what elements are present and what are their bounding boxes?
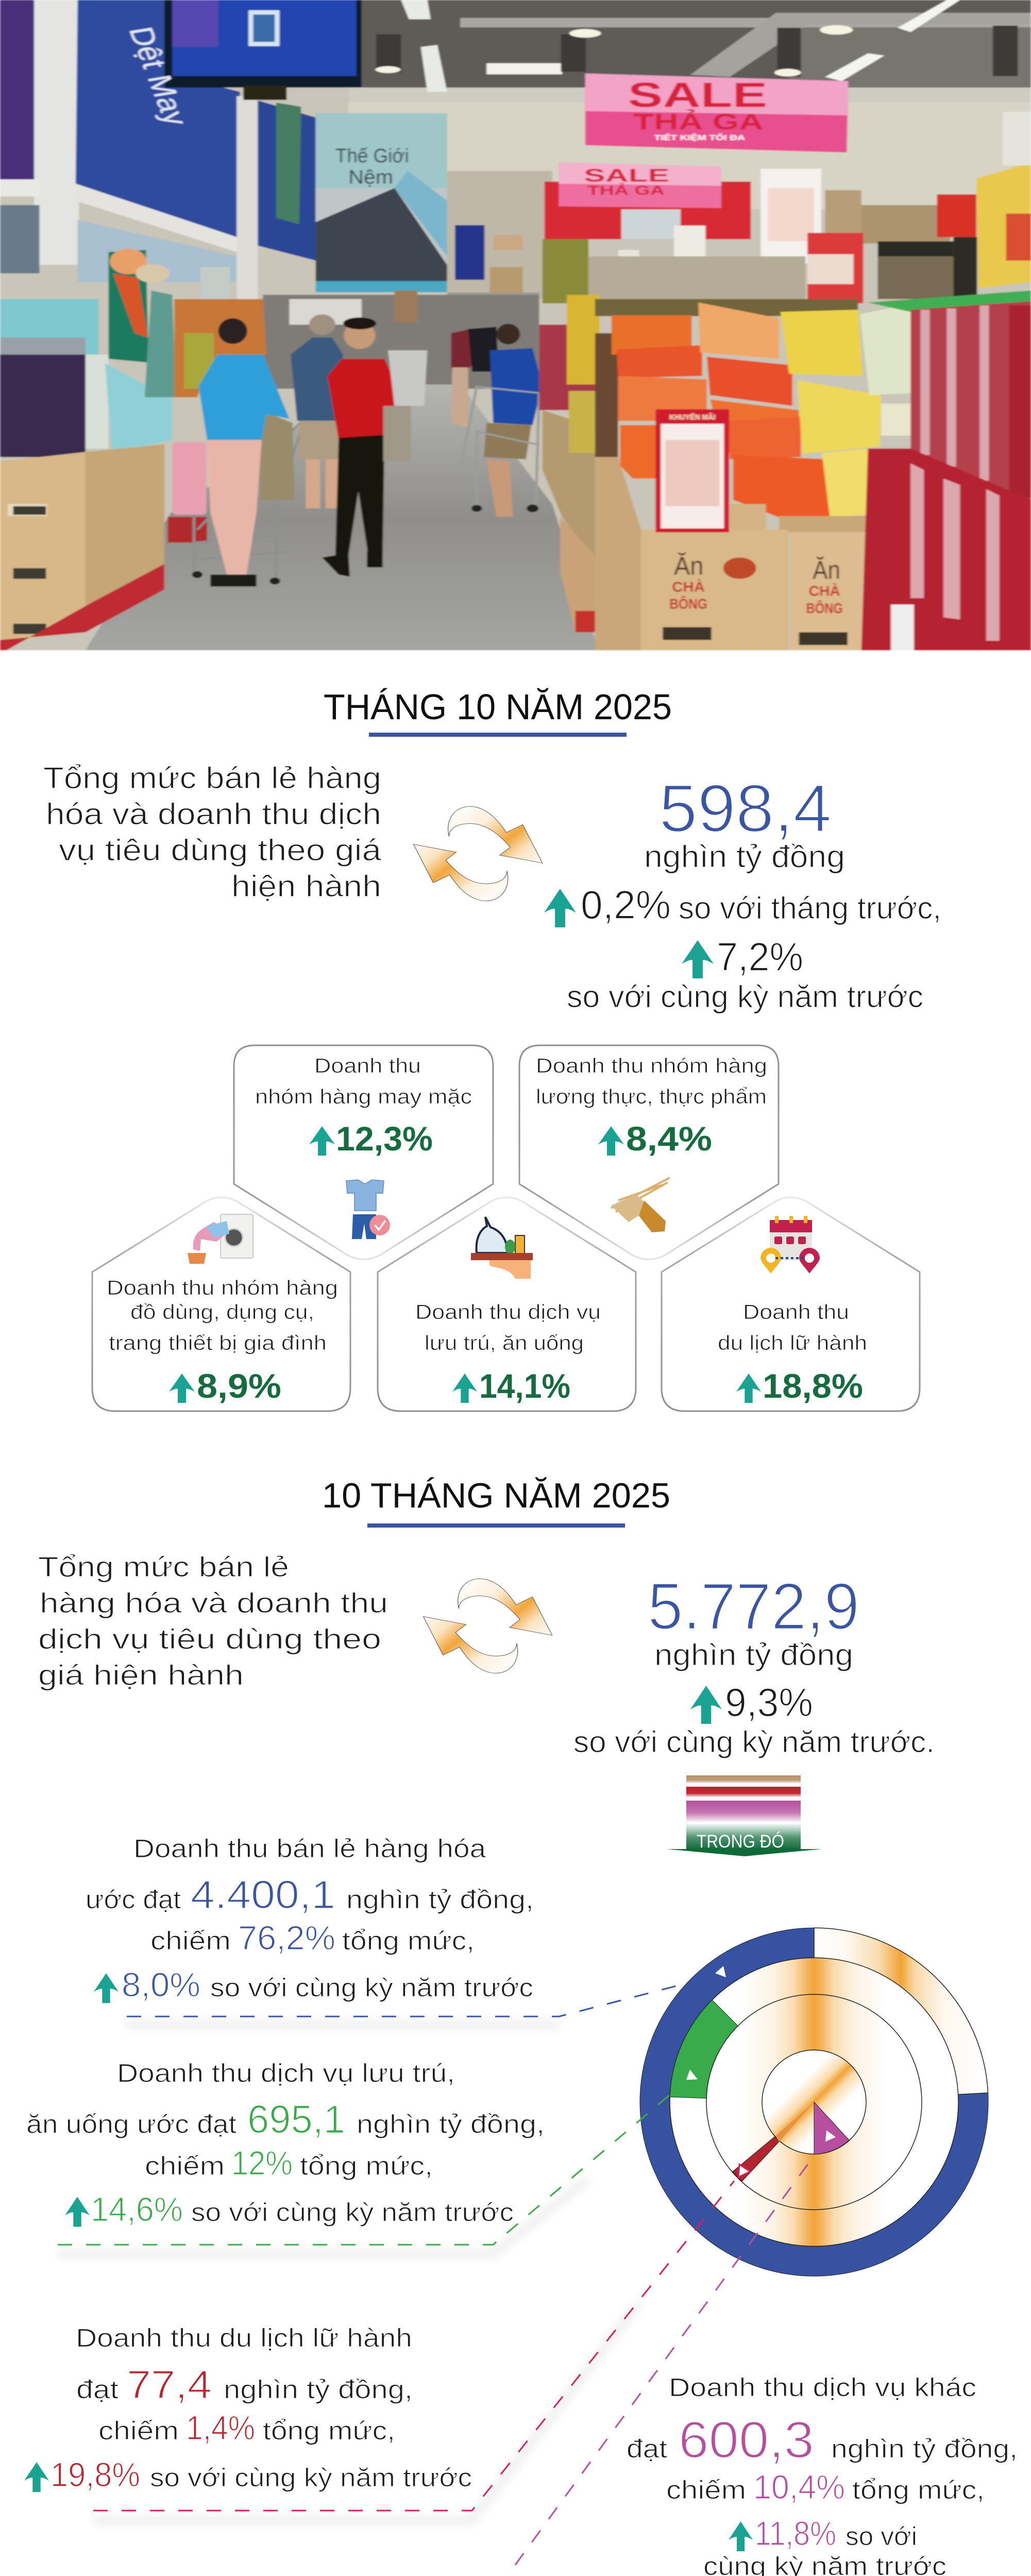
- section heading: tháng 10: THÁNG 10 NĂM 2025: [324, 687, 672, 727]
- hero photo: supermarket aisle: BÔNG: [806, 600, 843, 616]
- text: tổng mức tháng 10: hóa và doanh thu dịch: [46, 798, 381, 831]
- icon: trong đó arrow: [667, 1775, 822, 1856]
- text block: bán lẻ hàng hóa: 76,2%: [238, 1919, 335, 1957]
- text: tổng mức tháng 10: vụ tiêu dùng theo giá: [59, 834, 382, 867]
- key figure: 10 tháng: [573, 1570, 935, 1759]
- text block: bán lẻ hàng hóa: 8,0%: [122, 1965, 200, 2004]
- panel: du lịch lữ hành: Doanh thu: [743, 1301, 849, 1324]
- leader line shadows: [58, 2025, 963, 2576]
- text block: bán lẻ hàng hóa: chiếm: [150, 1926, 231, 1955]
- panel: du lịch lữ hành: 18,8%: [763, 1367, 863, 1405]
- dashed leader lines: [58, 1981, 963, 2576]
- text block: lưu trú ăn uống: nghìn tỷ đồng,: [357, 2110, 545, 2139]
- text block: du lịch lữ hành: 77,4: [127, 2363, 212, 2407]
- text: tổng mức tháng 10: [43, 761, 382, 903]
- text block: bán lẻ hàng hóa: Doanh thu bán lẻ hàng hóa: [133, 1834, 486, 1863]
- hero photo: supermarket aisle: Ăn: [813, 556, 840, 584]
- hero photo: supermarket aisle: THẢ GA: [633, 109, 764, 134]
- key figure: 10 tháng: so với cùng kỳ năm trước.: [573, 1725, 935, 1759]
- text: tổng mức tháng 10: hiện hành: [231, 870, 381, 903]
- icon: wheat and grain: [611, 1178, 670, 1232]
- text block: du lịch lữ hành: Doanh thu du lịch lữ hành: [76, 2324, 412, 2352]
- text block: du lịch lữ hành: tổng mức,: [263, 2416, 395, 2445]
- hero photo: supermarket aisle: Nệm: [348, 166, 393, 188]
- text block: bán lẻ hàng hóa: nghìn tỷ đồng,: [346, 1885, 534, 1914]
- panel: đồ dùng gia đình: Doanh thu nhóm hàng: [107, 1277, 338, 1299]
- text block: du lịch lữ hành: 19,8%: [50, 2455, 140, 2494]
- panel: lương thực: Doanh thu nhóm hàng: [536, 1055, 767, 1077]
- text block: dịch vụ khác: so với: [846, 2522, 917, 2551]
- icon: circular arrows: [414, 806, 543, 901]
- text: tổng mức 10 tháng: dịch vụ tiêu dùng theo: [38, 1623, 381, 1655]
- key figure: tháng 10: so với tháng trước,: [679, 891, 941, 925]
- hero photo: supermarket aisle: CHÀ: [672, 579, 705, 595]
- hero photo: supermarket aisle: SALE: [584, 165, 669, 185]
- icon: washing machine: [188, 1214, 253, 1264]
- hero photo: supermarket aisle: KHUYẾN MÃI: [669, 412, 715, 421]
- text block: dịch vụ khác: chiếm: [666, 2476, 746, 2504]
- key figure: 10 tháng: nghìn tỷ đồng: [654, 1638, 853, 1672]
- hero photo: supermarket aisle: Dệt May: [122, 24, 195, 128]
- hero photo: supermarket aisle: SALE: [628, 75, 767, 114]
- panel: may mặc: [234, 1045, 493, 1259]
- text block: dịch vụ khác: Doanh thu dịch vụ khác: [669, 2373, 976, 2402]
- panel: lưu trú ăn uống: [378, 1197, 636, 1411]
- text block: du lịch lữ hành: so với cùng kỳ năm trước: [150, 2463, 472, 2492]
- text block: dịch vụ khác: nghìn tỷ đồng,: [831, 2434, 1018, 2463]
- panel: lưu trú ăn uống: Doanh thu dịch vụ: [415, 1301, 601, 1324]
- section heading: 10 tháng: 10 THÁNG NĂM 2025: [322, 1476, 670, 1515]
- text block: bán lẻ hàng hóa: ước đạt: [86, 1885, 181, 1914]
- panel: lưu trú ăn uống: lưu trú, ăn uống: [425, 1332, 584, 1354]
- hero photo: supermarket aisle: BÔNG: [669, 595, 707, 612]
- text block: dịch vụ khác: [627, 2373, 1018, 2576]
- key figure: tháng 10: 0,2%: [581, 882, 671, 927]
- text block: lưu trú ăn uống: tổng mức,: [300, 2151, 433, 2180]
- text block: lưu trú ăn uống: chiếm: [145, 2151, 225, 2180]
- panel: du lịch lữ hành: du lịch lữ hành: [718, 1332, 867, 1354]
- icon: calendar and map pins: [760, 1216, 820, 1274]
- key figure: 10 tháng: 5.772,9: [648, 1570, 859, 1643]
- icon: shirt and jeans: [346, 1180, 390, 1239]
- text block: lưu trú ăn uống: so với cùng kỳ năm trước: [191, 2198, 514, 2227]
- panel: lương thực: 8,4%: [626, 1120, 712, 1158]
- text block: lưu trú ăn uống: 14,6%: [91, 2190, 183, 2228]
- text block: dịch vụ khác: 600,3: [679, 2411, 814, 2469]
- key figure: tháng 10: so với cùng kỳ năm trước: [567, 979, 923, 1014]
- key figure: tháng 10: [544, 770, 941, 1014]
- icon: food tray: [471, 1217, 533, 1279]
- icon: trong đó arrow: TRONG ĐÓ: [697, 1832, 784, 1852]
- text block: lưu trú ăn uống: Doanh thu dịch vụ lưu trú,: [117, 2059, 455, 2088]
- text: tổng mức 10 tháng: giá hiện hành: [38, 1659, 244, 1691]
- text block: bán lẻ hàng hóa: [86, 1834, 534, 2004]
- text block: du lịch lữ hành: 1,4%: [186, 2409, 255, 2447]
- hero photo: supermarket aisle: CHÀ: [809, 583, 840, 599]
- text block: du lịch lữ hành: chiếm: [98, 2416, 179, 2445]
- text block: dịch vụ khác: đạt: [627, 2434, 667, 2463]
- text block: lưu trú ăn uống: 695,1: [247, 2097, 345, 2142]
- panel: đồ dùng gia đình: đồ dùng, dụng cụ,: [130, 1301, 314, 1324]
- text block: bán lẻ hàng hóa: tổng mức,: [342, 1926, 475, 1955]
- text: tổng mức 10 tháng: Tổng mức bán lẻ: [38, 1551, 289, 1583]
- text block: lưu trú ăn uống: ăn uống ước đạt: [26, 2110, 236, 2139]
- text: tổng mức tháng 10: Tổng mức bán lẻ hàng: [43, 761, 381, 795]
- text block: bán lẻ hàng hóa: so với cùng kỳ năm trước: [210, 1973, 533, 2002]
- text block: bán lẻ hàng hóa: 4.400,1: [191, 1873, 335, 1917]
- icon: circular arrows: [424, 1579, 552, 1673]
- hero photo: supermarket aisle: [0, 0, 1031, 650]
- text: tổng mức 10 tháng: [38, 1551, 388, 1691]
- panel: du lịch lữ hành: [662, 1197, 920, 1411]
- text block: lưu trú ăn uống: 12%: [231, 2144, 293, 2182]
- text: tổng mức 10 tháng: hàng hóa và doanh thu: [40, 1587, 388, 1619]
- panel: lương thực: [519, 1045, 779, 1259]
- panel: đồ dùng gia đình: 8,9%: [197, 1367, 281, 1405]
- panel: đồ dùng gia đình: trang thiết bị gia đình: [109, 1332, 327, 1354]
- hero photo: supermarket aisle: TIẾT KIỆM TỐI ĐA: [654, 132, 745, 142]
- hero photo: supermarket aisle: Ăn: [674, 552, 703, 580]
- key figure: tháng 10: 7,2%: [717, 934, 803, 979]
- panel: may mặc: Doanh thu: [314, 1055, 421, 1077]
- text block: du lịch lữ hành: [24, 2324, 472, 2494]
- donut chart: [640, 1928, 988, 2276]
- hero photo: supermarket aisle: THẢ GA: [587, 183, 665, 198]
- panel: đồ dùng gia đình: [92, 1197, 350, 1411]
- hero photo: supermarket aisle: Thế Giới: [335, 145, 409, 167]
- text block: lưu trú ăn uống: [26, 2059, 545, 2228]
- text block: dịch vụ khác: 11,8%: [755, 2514, 836, 2552]
- text block: dịch vụ khác: tổng mức,: [852, 2476, 985, 2504]
- text block: dịch vụ khác: 10,4%: [753, 2468, 845, 2506]
- panel: lưu trú ăn uống: 14,1%: [479, 1367, 570, 1405]
- panel: may mặc: nhóm hàng may mặc: [255, 1086, 472, 1108]
- panel: may mặc: 12,3%: [336, 1120, 433, 1158]
- text block: du lịch lữ hành: nghìn tỷ đồng,: [224, 2375, 413, 2404]
- key figure: tháng 10: nghìn tỷ đồng: [644, 839, 845, 874]
- key figure: 10 tháng: 9,3%: [725, 1680, 813, 1725]
- panel: lương thực: lương thực, thực phẩm: [536, 1086, 767, 1108]
- key figure: tháng 10: 598,4: [659, 770, 832, 846]
- text block: du lịch lữ hành: đạt: [76, 2375, 119, 2404]
